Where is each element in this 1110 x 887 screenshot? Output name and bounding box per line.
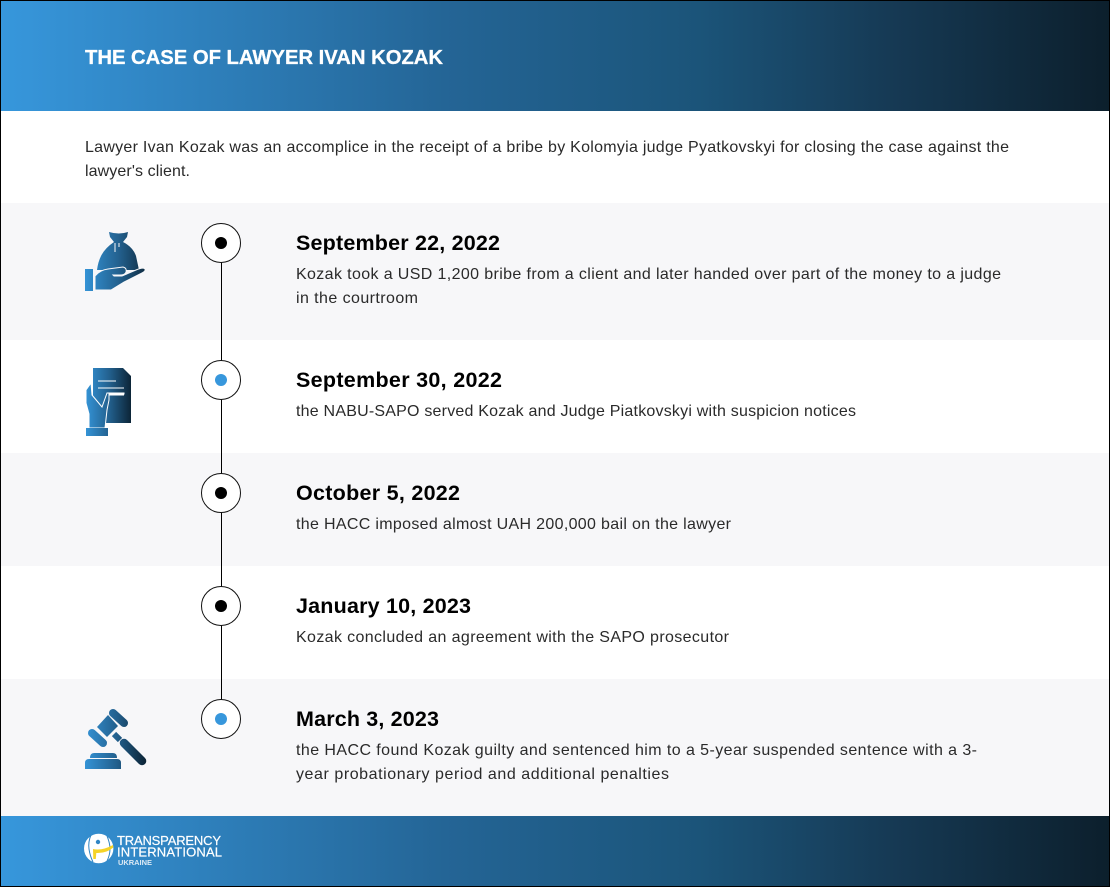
- row background: March 3: [0, 679, 1110, 816]
- event: September 30, 2022: the NABU-SAPO served Kozak and Judge Piatkovskyi with suspicion notices: [296, 403, 856, 420]
- timeline: [202, 224, 240, 738]
- icon: judge's gavel: [85, 713, 142, 769]
- event: September 30, 2022: September 30, 2022: [296, 368, 502, 392]
- header banner: [0, 0, 1110, 111]
- logo emblem: [84, 834, 113, 863]
- logo: Transparency International Ukraine: INTERNATIONAL: [117, 844, 222, 860]
- event: March 3, 2023: [296, 707, 977, 783]
- title: THE CASE OF LAWYER IVAN KOZAK: [85, 46, 443, 69]
- event: October 5, 2022: the HACC imposed almost UAH 200,000 bail on the lawyer: [296, 516, 732, 533]
- marker: September 22, 2022: [202, 224, 240, 262]
- intro text: [85, 139, 1009, 180]
- intro text: Lawyer Ivan Kozak was an accomplice in the receipt of a bribe by Kolomyia judge Pyatkovskyi for closing the case against the: [85, 139, 1009, 156]
- row background: September 22: [0, 203, 1110, 340]
- event: January 10, 2023: Kozak concluded an agreement with the SAPO prosecutor: [296, 629, 730, 646]
- event: September 22, 2022: Kozak took a USD 1,200 bribe from a client and later handed over part of the money to a judge: [296, 266, 1001, 283]
- footer banner: [0, 816, 1110, 887]
- row background: October 5: [0, 453, 1110, 566]
- event: October 5, 2022: October 5, 2022: [296, 481, 460, 505]
- event: March 3, 2023: year probationary period and additional penalties: [296, 766, 669, 783]
- logo: Transparency International Ukraine: TRANSPARENCY: [117, 833, 221, 848]
- marker: October 5, 2022: [202, 474, 240, 512]
- intro text: lawyer's client.: [85, 163, 190, 180]
- event: March 3, 2023: the HACC found Kozak guilty and sentenced him to a 5-year suspended sentence with a 3-: [296, 742, 977, 759]
- event: September 30, 2022: [296, 368, 856, 420]
- event: September 22, 2022: [296, 231, 1001, 307]
- logo: Transparency International Ukraine: [84, 833, 222, 867]
- event: March 3, 2023: March 3, 2023: [296, 707, 439, 731]
- event: January 10, 2023: January 10, 2023: [296, 594, 471, 618]
- event: January 10, 2023: [296, 594, 730, 646]
- icon: hand holding money bag: [85, 232, 145, 291]
- marker: January 10, 2023: [202, 586, 240, 626]
- marker: March 3, 2023: [202, 700, 240, 738]
- logo: Transparency International Ukraine: UKRAINE: [118, 858, 152, 867]
- event: September 22, 2022: in the courtroom: [296, 290, 418, 307]
- event: October 5, 2022: [296, 481, 732, 533]
- marker: September 30, 2022: [202, 360, 240, 400]
- event: September 22, 2022: September 22, 2022: [296, 231, 500, 255]
- icon: hand holding document: [86, 368, 131, 436]
